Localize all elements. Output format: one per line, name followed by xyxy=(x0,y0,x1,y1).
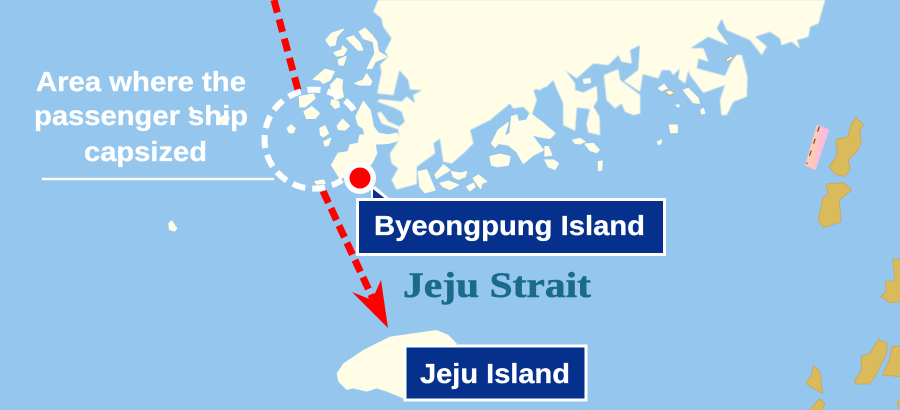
Byeongpung Island marker xyxy=(344,162,390,200)
coastal islands east xyxy=(573,56,733,171)
label: area where the passenger ship capsized: capsized xyxy=(84,136,207,167)
ship route arrow xyxy=(274,0,388,328)
label: Byeongpung Island: Byeongpung Island xyxy=(374,210,645,241)
leader line xyxy=(42,178,274,180)
label: area where the passenger ship capsized: Area where the xyxy=(36,66,246,97)
label: Byeongpung Island xyxy=(358,200,664,254)
mainland coast xyxy=(373,0,825,189)
label: Jeju Strait: Jeju Strait xyxy=(403,265,591,305)
label: area where the passenger ship capsized: passenger ship xyxy=(34,100,248,131)
pink island strip xyxy=(805,125,829,170)
label: Jeju Island xyxy=(405,346,586,400)
label: area where the passenger ship capsized xyxy=(34,66,248,167)
coastal islands west xyxy=(287,28,558,193)
yellow islands on the right xyxy=(806,117,900,410)
dashed circle: capsize area xyxy=(265,90,354,189)
offshore islets under label xyxy=(168,106,230,232)
label: Jeju Island: Jeju Island xyxy=(420,358,570,389)
Jeju Island landmass xyxy=(337,330,457,398)
